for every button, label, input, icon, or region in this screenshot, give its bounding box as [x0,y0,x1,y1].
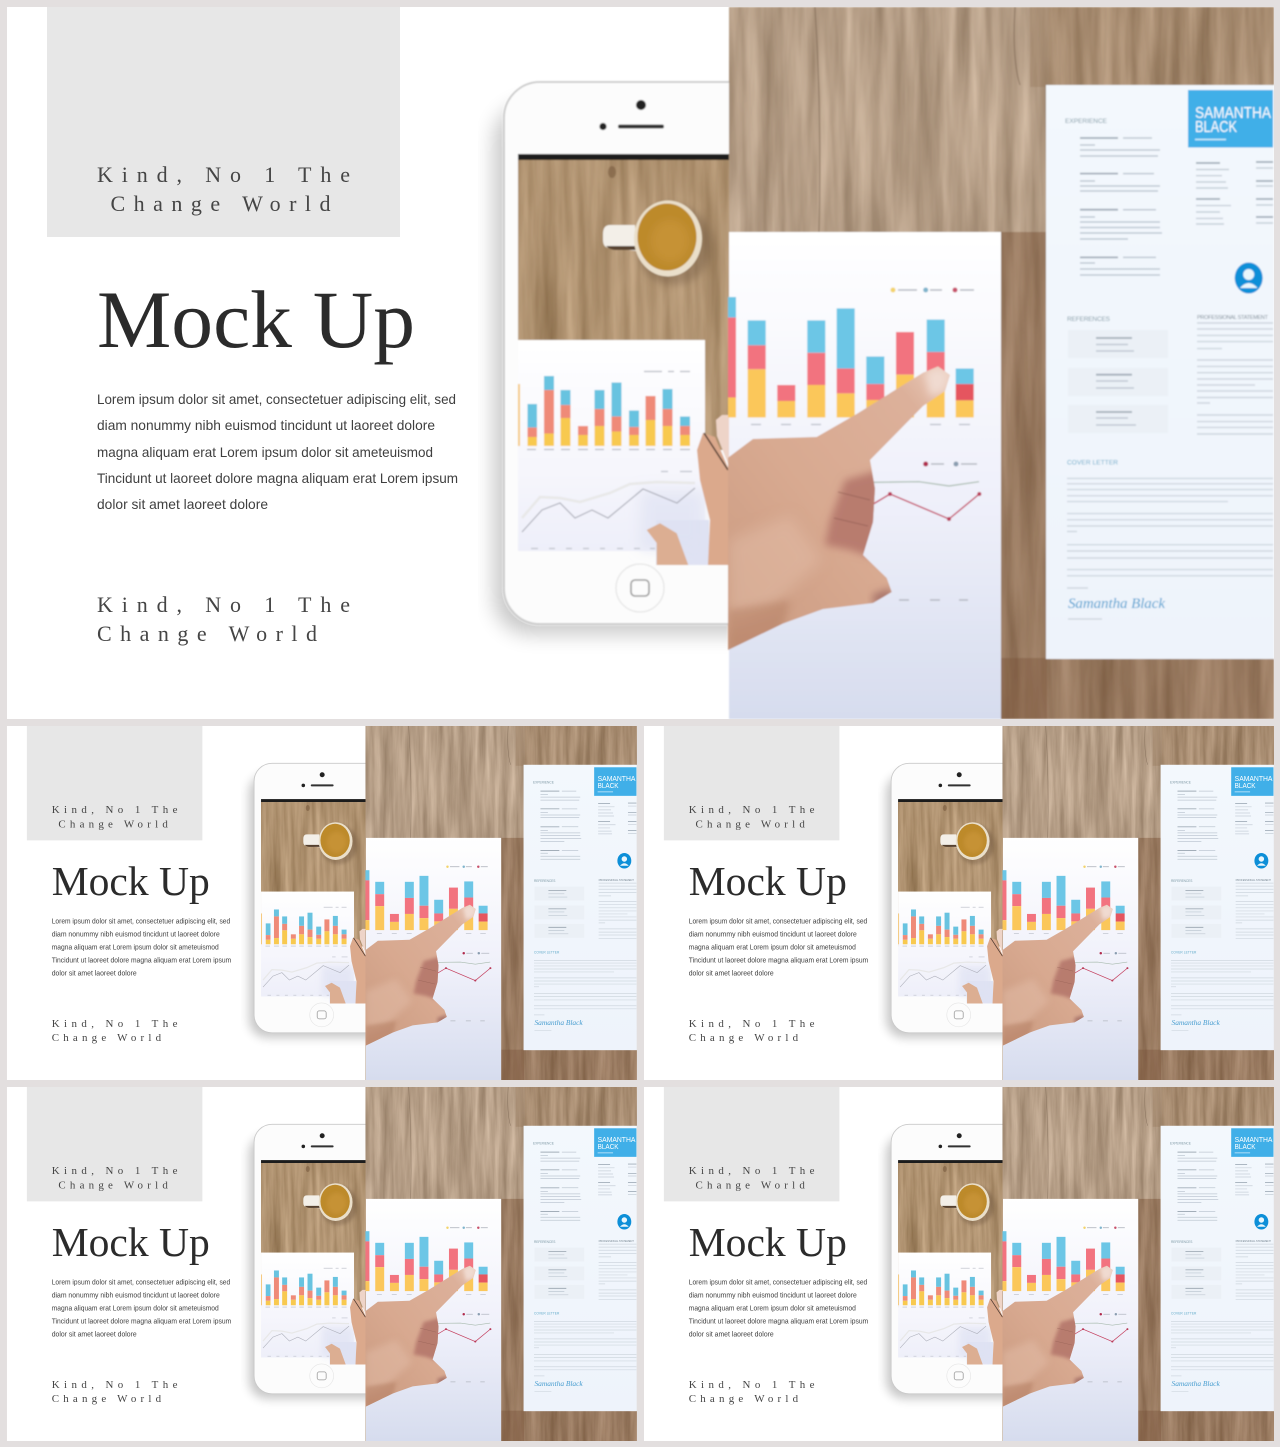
body paragraph: dolor sit amet laoreet dolore [689,1332,774,1339]
resume paper [1046,85,1274,659]
body paragraph: Lorem ipsum dolor sit amet, consectetuer adipiscing elit, sed [52,1279,230,1286]
body paragraph: diam nonummy nibh euismod tincidunt ut laoreet dolore [52,1292,220,1299]
bottom tagline: Change World [97,621,317,646]
body paragraph: Tincidunt ut laoreet dolore magna aliquam erat Lorem ipsum [52,1319,231,1326]
body paragraph: Tincidunt ut laoreet dolore magna aliquam erat Lorem ipsum [52,958,231,965]
body paragraph: Tincidunt ut laoreet dolore magna aliquam erat Lorem ipsum [97,470,458,486]
body paragraph: Lorem ipsum dolor sit amet, consectetuer adipiscing elit, sed [52,918,230,925]
tagline in grey panel: Change World [110,191,330,216]
line chart [860,462,981,600]
tagline in grey panel: Kind, No 1 The [689,1165,815,1177]
tagline in grey panel: Change World [58,1179,168,1191]
bottom tagline: Kind, No 1 The [97,592,350,617]
body paragraph: Tincidunt ut laoreet dolore magna aliquam erat Lorem ipsum [689,958,868,965]
bottom tagline: Change World [52,1032,162,1044]
phone screen chart paper [518,340,709,565]
body paragraph: dolor sit amet laoreet dolore [689,971,774,978]
body paragraph [689,918,868,978]
resume professional statement [1197,315,1273,434]
body paragraph: magna aliquam erat Lorem ipsum dolor sit ameteuismod [97,444,433,460]
slide background [644,726,1274,1080]
body paragraph: dolor sit amet laoreet dolore [52,971,137,978]
grey label panel [664,726,839,840]
body paragraph: magna aliquam erat Lorem ipsum dolor sit ameteuismod [52,945,219,952]
resume cover letter [1067,460,1273,619]
heading: Mock Up [52,1220,210,1265]
grey label panel [664,1087,839,1201]
body paragraph: Lorem ipsum dolor sit amet, consectetuer adipiscing elit, sed [689,1279,867,1286]
heading: Mock Up [97,274,415,365]
bottom tagline: Change World [689,1393,799,1405]
resume name header [1188,90,1273,148]
body paragraph: Lorem ipsum dolor sit amet, consectetuer adipiscing elit, sed [97,391,456,407]
tagline in grey panel [689,804,815,830]
body paragraph: magna aliquam erat Lorem ipsum dolor sit ameteuismod [52,1306,219,1313]
body paragraph [97,391,458,512]
resume signature: Samantha Black [1068,596,1165,612]
heading: Mock Up [689,859,847,904]
body paragraph: dolor sit amet laoreet dolore [52,1332,137,1339]
wood desk [729,7,1274,719]
resume references section [1067,316,1168,433]
slide background [644,1087,1274,1441]
body paragraph: Lorem ipsum dolor sit amet, consectetuer adipiscing elit, sed [689,918,867,925]
phone bar chart [518,372,690,450]
tagline in grey panel [52,804,178,830]
bottom tagline: Kind, No 1 The [52,1379,178,1391]
bottom tagline: Change World [52,1393,162,1405]
resume references section: REFERENCES [1067,316,1111,323]
phone line chart [522,472,695,548]
photo composite [886,1087,1274,1441]
bottom tagline: Kind, No 1 The [689,1379,815,1391]
tagline in grey panel: Kind, No 1 The [52,1165,178,1177]
chart paper [729,232,1001,719]
coffee cup [603,200,712,285]
tagline in grey panel [52,1165,178,1191]
tagline in grey panel: Kind, No 1 The [52,804,178,816]
body paragraph: magna aliquam erat Lorem ipsum dolor sit ameteuismod [689,1306,856,1313]
resume contact lines [1196,168,1273,224]
bottom tagline: Change World [689,1032,799,1044]
resume profile avatar [1235,262,1263,294]
body paragraph: diam nonummy nibh euismod tincidunt ut laoreet dolore [689,1292,857,1299]
bottom tagline: Kind, No 1 The [689,1018,815,1030]
grey label panel [27,1087,202,1201]
resume name header: SAMANTHA [1195,105,1272,122]
bottom tagline: Kind, No 1 The [52,1018,178,1030]
photo composite [886,726,1274,1080]
phone screen wood background [518,160,733,450]
slide background [7,7,1274,719]
phone mockup [504,82,804,624]
tagline in grey panel [97,162,350,216]
body paragraph: magna aliquam erat Lorem ipsum dolor sit ameteuismod [689,945,856,952]
heading: Mock Up [689,1220,847,1265]
phone shadow [494,104,794,634]
resume experience section: EXPERIENCE [1065,118,1108,125]
body paragraph: diam nonummy nibh euismod tincidunt ut laoreet dolore [689,931,857,938]
photo composite: phone, wood desk, chart paper, resume, hand [494,7,1274,719]
body paragraph: dolor sit amet laoreet dolore [97,496,268,512]
slide 4: small mock up slide, bottom left [7,1087,637,1441]
heading: Mock Up [52,859,210,904]
body paragraph: diam nonummy nibh euismod tincidunt ut laoreet dolore [52,931,220,938]
slide 3: small mock up slide, top right [644,726,1274,1080]
phone camera and speaker [599,100,664,130]
tagline in grey panel: Kind, No 1 The [689,804,815,816]
body paragraph: Tincidunt ut laoreet dolore magna aliquam erat Lorem ipsum [689,1319,868,1326]
slide background [7,1087,637,1441]
body paragraph: diam nonummy nibh euismod tincidunt ut laoreet dolore [97,417,435,433]
resume cover letter: COVER LETTER [1067,460,1118,466]
bottom tagline [689,1018,815,1044]
slide 2: small mock up slide, top left [7,726,637,1080]
tagline in grey panel: Kind, No 1 The [97,162,350,187]
hand pointing at chart [728,366,950,660]
body paragraph [689,1279,868,1339]
resume experience section [1065,118,1162,275]
bottom tagline [52,1018,178,1044]
slide 1: large mock up slide [7,7,1274,719]
tagline in grey panel [689,1165,815,1191]
tagline in grey panel: Change World [695,1179,805,1191]
phone screen top bar [518,154,733,160]
body paragraph [52,1279,231,1339]
tagline in grey panel: Change World [58,818,168,830]
stacked bar chart [728,297,974,424]
phone screen hand [647,415,729,565]
grey label panel [27,726,202,840]
bottom tagline [97,592,350,646]
body paragraph [52,918,231,978]
slide background [7,726,637,1080]
resume professional statement: PROFESSIONAL STATEMENT [1197,315,1269,321]
resume name header: BLACK [1195,119,1238,136]
bottom tagline [52,1379,178,1405]
photo composite [249,1087,637,1441]
bottom tagline [689,1379,815,1405]
bar chart legend [890,288,974,292]
resume contact details [1196,162,1273,217]
tagline in grey panel: Change World [695,818,805,830]
grey label panel [47,7,400,237]
slide 5: small mock up slide, bottom right [644,1087,1274,1441]
phone home button [616,564,664,612]
photo composite [249,726,637,1080]
